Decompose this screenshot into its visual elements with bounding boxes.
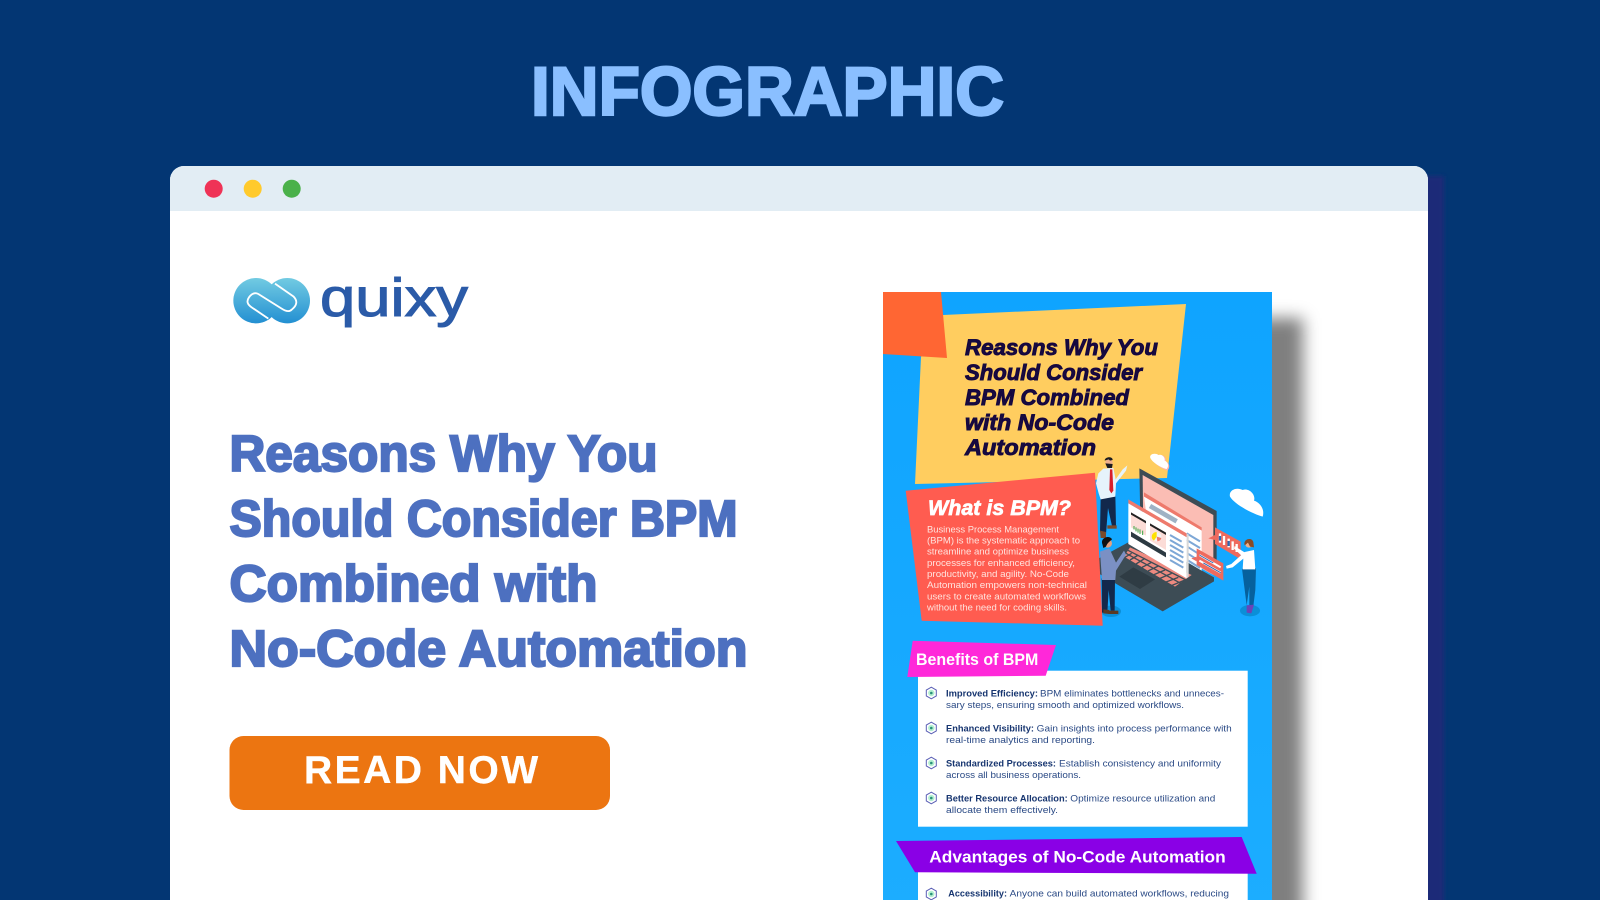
advantage: accessibility: Anyone can build automated workflows, reducing [1010,888,1229,899]
text bubble [1197,548,1223,581]
window control dots [205,180,301,198]
benefits banner: Benefits of BPM [916,651,1038,669]
logo wordmark: quixy [320,268,468,328]
what is BPM body text: users to create automated workflows [927,591,1086,601]
benefit: better resource allocation: allocate them effectively. [946,805,1058,816]
cloud left [1150,454,1169,471]
benefit: better resource allocation: Optimize resource utilization and [1070,793,1215,804]
benefit: better resource allocation: Better Resource Allocation: [946,793,1068,804]
keyboard keys [1124,547,1192,587]
chart bubble [1215,527,1241,559]
woman in white shirt [1226,539,1260,616]
poster title: Should Consider [965,360,1143,385]
button: read now: READ NOW [304,749,538,792]
poster title: Reasons Why You [965,335,1159,360]
benefit: standardized processes [926,757,1221,781]
headline: Reasons Why You [230,425,658,482]
advantages white panel [918,870,1248,900]
yellow title panel [915,304,1186,484]
benefit: better resource allocation [926,792,1215,816]
benefits banner [907,641,1056,677]
poster title [964,335,1159,460]
advantage: accessibility [926,888,1229,900]
advantages banner: Advantages of No-Code Automation [929,847,1226,866]
what is BPM body text [926,524,1087,612]
headline [230,425,748,677]
benefit: enhanced visibility: Gain insights into process performance with [1037,723,1232,734]
benefit: enhanced visibility: real-time analytics and reporting. [946,735,1095,746]
poster shadow [1200,318,1303,900]
what is BPM panel [906,473,1103,626]
infographic poster [883,292,1272,900]
man in blue jacket [1100,537,1126,617]
what is BPM body text: streamline and optimize business [927,547,1069,557]
poster title: with No-Code [965,410,1114,435]
headline: Combined with [230,555,598,612]
advantages banner [896,837,1257,874]
orange corner block [883,292,947,358]
what is BPM body text: (BPM) is the systematic approach to [927,536,1080,546]
what is BPM body text: productivity, and agility. No-Code [927,569,1069,579]
laptop [1088,468,1241,611]
benefit: improved efficiency: sary steps, ensuring smooth and optimized workflows. [946,700,1184,711]
back window [1144,492,1202,531]
headline: No-Code Automation [230,620,748,677]
browser title bar [170,166,1428,211]
benefit: improved efficiency: BPM eliminates bottlenecks and unneces- [1040,688,1224,699]
what is BPM body text: without the need for coding skills. [926,602,1067,612]
benefit: standardized processes: Standardized Processes: [946,758,1056,769]
advantage: accessibility: Accessibility: [948,888,1007,899]
benefit: improved efficiency: Improved Efficiency: [946,688,1038,699]
benefit: enhanced visibility [926,722,1232,746]
trackpad [1119,567,1155,589]
benefits white panel [918,671,1248,827]
quixy logo [233,268,468,328]
benefit: enhanced visibility: Enhanced Visibility: [946,723,1034,734]
button: read now [230,736,610,810]
poster title: Automation [964,435,1096,460]
what is BPM heading: What is BPM? [928,496,1071,520]
what is BPM body text: Automation empowers non-technical [927,580,1087,590]
browser window [170,166,1428,900]
benefit: standardized processes: Establish consistency and uniformity [1059,758,1221,769]
browser window shadow [1420,176,1444,900]
title: INFOGRAPHIC [531,53,1004,130]
front window [1128,499,1187,537]
man with red tie [1096,457,1127,538]
what is BPM body text: processes for enhanced efficiency, [927,558,1075,568]
headline: Should Consider BPM [230,490,738,547]
logo mark [233,278,310,323]
benefit: standardized processes: across all business operations. [946,770,1081,781]
benefit: improved efficiency [926,687,1224,711]
what is BPM body text: Business Process Management [927,524,1059,534]
poster title: BPM Combined [965,385,1130,410]
cloud right [1230,489,1263,517]
illustration: team around laptop [1088,454,1263,617]
